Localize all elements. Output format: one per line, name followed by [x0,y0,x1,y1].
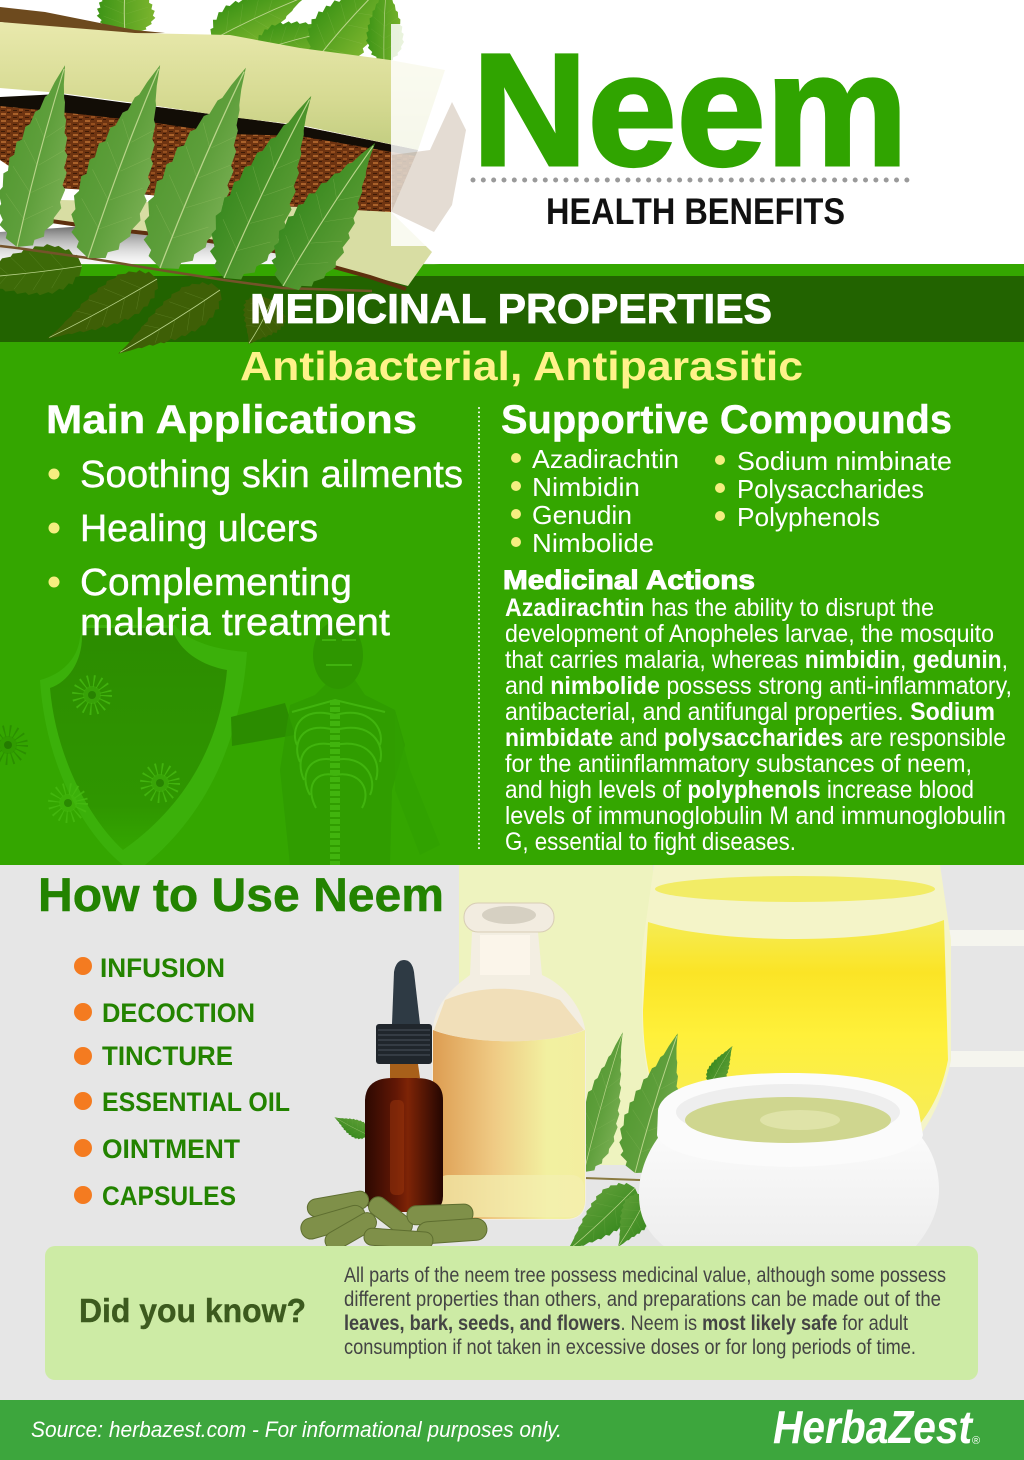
paragraph: medicinal actions: antibacterial, and antifungal properties. Sodium [505,698,995,726]
compound list column 1: Genudin [532,500,632,530]
heading: medicinal properties: MEDICINAL PROPERTIES [250,285,772,332]
capsules: CAPSULES [102,1181,236,1211]
paragraph: medicinal actions [505,594,1012,856]
dotted divider [473,178,910,182]
glass mug [642,865,1024,1135]
leaf 5 [255,125,404,304]
shield [0,625,247,865]
compound list column 1: Nimbidin [532,472,640,502]
panel: how to use background [0,865,1024,1400]
green leaves [330,1025,742,1268]
mug handle [948,938,1024,1059]
bullet: healing ulcers: Healing ulcers [80,508,318,550]
dark bark edge top [0,7,165,34]
registered mark: ® [972,1435,980,1447]
panel: main applications [46,398,463,644]
dropper bottle [365,960,443,1212]
paragraph: medicinal actions: Azadirachtin has the ability to disrupt the [505,594,934,622]
paragraph: medicinal actions: G, essential to fight diseases. [505,828,796,856]
leaf 1 [0,57,97,255]
callout text: All parts of the neem tree possess medicinal value, although some possess [344,1264,946,1287]
ointment: OINTMENT [102,1134,240,1164]
upper bark strip [0,22,445,150]
photo: neem bark and leaves [0,0,481,289]
virus particles [54,681,174,817]
lower bark edge [30,218,406,289]
illustration: shield and skeleton [0,621,440,865]
header band: medicinal properties [0,276,1024,342]
compound list column 2: Polysaccharides [737,474,924,504]
callout text [344,1264,946,1359]
compound list column 2 [715,446,952,532]
panel: medicinal properties background [0,264,1024,865]
paragraph: medicinal actions: and high levels of polyphenols increase blood [505,776,974,804]
subheading: medicinal actions: Medicinal Actions [503,565,755,595]
footer bar [0,1400,1024,1460]
decoction: DECOCTION [102,998,255,1028]
virus outside shield [0,731,22,759]
capsules [298,1190,488,1254]
callout: did you know [45,1246,978,1380]
logo: HerbaZest: HerbaZest [773,1401,973,1453]
bullet: malaria: malaria treatment [80,602,390,644]
ribs [292,640,385,865]
dotted column divider [478,408,480,850]
bullet: soothing skin: Soothing skin ailments [80,454,463,496]
skull [313,621,363,689]
compound list column 1: Azadirachtin [532,444,679,474]
arm [231,703,295,746]
photo: neem preparations [298,865,1024,1268]
tincture: TINCTURE [102,1041,233,1071]
bullet: malaria [48,562,390,644]
callout text: leaves, bark, seeds, and flowers. Neem is most likely safe for adult [344,1312,908,1335]
panel: supportive compounds [501,398,1012,856]
oil bottle [432,903,586,1220]
paragraph: medicinal actions: levels of immunoglobulin M and immunoglobulin [505,802,1006,830]
mug liquid [643,920,948,1130]
compound list column 2: Polyphenols [737,502,880,532]
pale bottle behind [459,865,653,1165]
far arm [395,712,440,855]
dark leaves over the green band [0,241,292,372]
ointment jar [639,1073,939,1247]
heading: Supportive Compounds [501,398,952,442]
skeleton figure [231,621,440,865]
white overlay fading bark [391,24,481,246]
paragraph: medicinal actions: that carries malaria, whereas nimbidin, gedunin, [505,646,1008,674]
mug surface [655,876,935,902]
dark gap [0,94,418,156]
callout heading: Did you know? [79,1292,306,1329]
paragraph: medicinal actions: development of Anopheles larvae, the mosquito [505,620,994,648]
paragraph: medicinal actions: nimbidate and polysaccharides are responsible [505,724,1006,752]
bullet: malaria: Complementing [80,562,352,604]
neem branch with five leaves [0,53,404,304]
leaf 2 [55,53,194,271]
title: Neem: Neem [472,20,908,199]
callout text: different properties than others, and preparations can be made out of the [344,1288,941,1311]
properties subtitle: Antibacterial, Antiparasitic [240,343,803,389]
top leaves behind bark [96,0,410,81]
subtitle: HEALTH BENEFITS [546,191,845,232]
source note: Source: herbazest.com - For informational purposes only. [31,1417,562,1442]
heading: how to use neem: How to Use Neem [38,868,444,921]
leaf 3 [126,53,281,283]
list: preparations [74,953,290,1211]
mug glass [642,865,951,1135]
paragraph: medicinal actions: for the antiinflammatory substances of neem, [505,750,972,778]
infusion: INFUSION [100,953,225,983]
compound list column 1: Nimbolide [532,528,654,558]
torso [280,680,405,865]
bark brown inner [0,98,418,213]
soft shadow under bark [0,225,440,265]
compound list column 1 [511,444,679,558]
lower bark strip [35,200,432,286]
paragraph: medicinal actions: and nimbolide possess strong anti-inflammatory, [505,672,1012,700]
compound list column 2: Sodium nimbinate [737,446,952,476]
faded bark ghost [392,102,466,232]
leaf 4 [193,81,343,293]
essential oil: ESSENTIAL OIL [102,1087,290,1117]
callout text: consumption if not taken in excessive doses or for long periods of time. [344,1336,916,1359]
heading: Main Applications [46,398,417,442]
